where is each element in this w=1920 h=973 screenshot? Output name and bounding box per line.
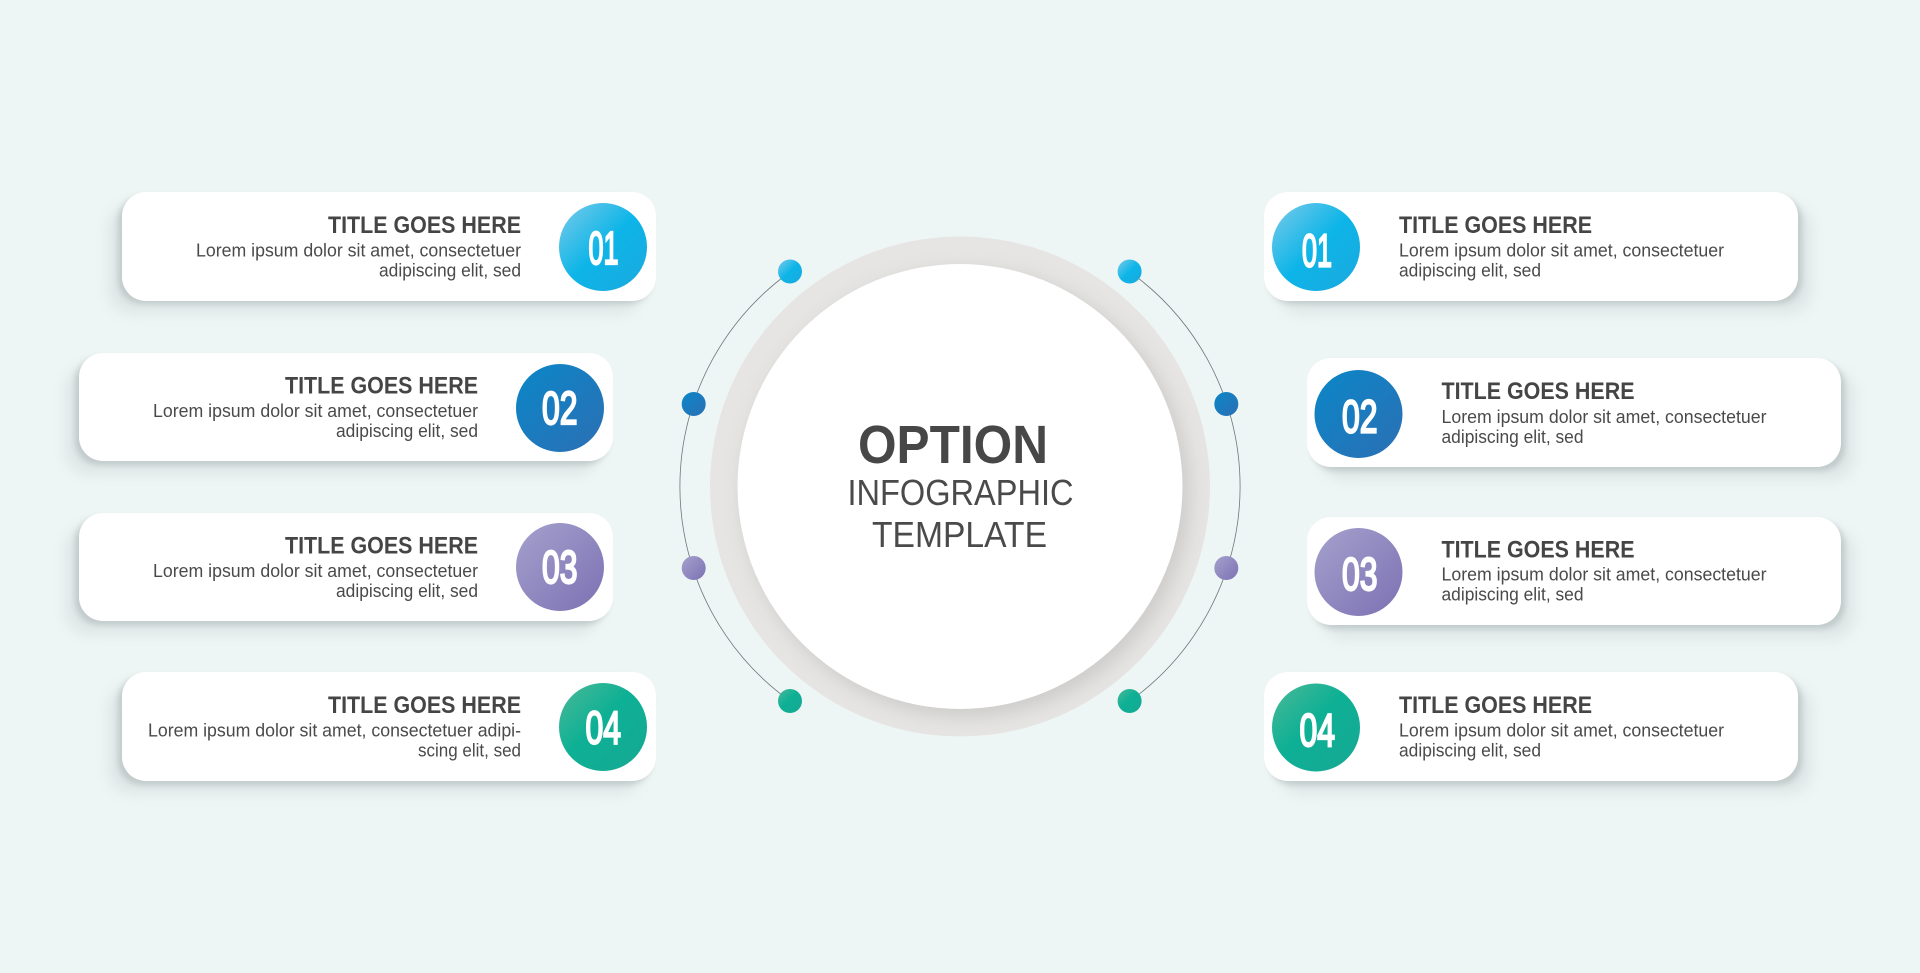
panel: central circle (710, 236, 1210, 736)
icon: dot 4 (1118, 689, 1142, 713)
icon: number 02 (1314, 370, 1402, 458)
panel: left card 3 (65, 513, 613, 635)
icon: dot 4 (778, 689, 802, 713)
text block: adipiscing elit, sed (1442, 427, 1584, 447)
icon: number 03: 03 (1342, 548, 1378, 600)
text block: Lorem ipsum dolor sit amet, consectetuer (153, 561, 478, 581)
icon: number 03 (516, 523, 604, 611)
heading: TITLE GOES HERE (1399, 212, 1592, 239)
panel: right card 3 (1307, 517, 1855, 639)
text block: adipiscing elit, sed (379, 260, 521, 280)
text block: Lorem ipsum dolor sit amet, consectetuer (1399, 240, 1724, 260)
text block: infographic template: INFOGRAPHIC (848, 472, 1074, 513)
text block: Lorem ipsum dolor sit amet, consectetuer (1399, 720, 1724, 740)
icon: number 04: 04 (1300, 704, 1335, 756)
icon: number 02: 02 (542, 382, 578, 434)
heading: TITLE GOES HERE (285, 532, 478, 560)
icon: number 04 (1272, 684, 1360, 772)
panel: right card 4 (1264, 672, 1812, 794)
icon: number 01: 01 (1302, 224, 1332, 276)
heading: TITLE GOES HERE (328, 692, 521, 719)
heading: TITLE GOES HERE (1442, 378, 1634, 405)
heading: TITLE GOES HERE (285, 372, 478, 400)
panel: left card 4 (108, 672, 656, 794)
text block: infographic template: TEMPLATE (872, 514, 1047, 555)
icon: number 02 (516, 364, 604, 452)
text block: scing elit, sed (418, 740, 521, 760)
icon: dot 1 (778, 260, 802, 284)
heading: TITLE GOES HERE (328, 212, 521, 239)
text block: Lorem ipsum dolor sit amet, consectetuer (153, 401, 478, 421)
icon: number 01 (1272, 203, 1360, 291)
icon: dot 2 (682, 392, 706, 416)
left connector arc with dots (680, 260, 802, 713)
text block: Lorem ipsum dolor sit amet, consectetuer adipi- (148, 720, 521, 740)
icon: dot 1 (1118, 260, 1142, 284)
heading: TITLE GOES HERE (1399, 692, 1592, 719)
icon: number 02: 02 (1342, 390, 1378, 442)
text block: adipiscing elit, sed (336, 581, 478, 601)
right connector arc with dots (1118, 260, 1240, 713)
text block: Lorem ipsum dolor sit amet, consectetuer (1442, 407, 1766, 427)
icon: number 01: 01 (588, 222, 618, 274)
icon: dot 3 (1214, 556, 1238, 580)
icon: dot 3 (682, 556, 706, 580)
text block: adipiscing elit, sed (1399, 740, 1541, 760)
panel: left card 2 (65, 353, 613, 475)
text block: adipiscing elit, sed (336, 421, 478, 441)
panel: left card 1 (108, 192, 656, 314)
heading: TITLE GOES HERE (1442, 536, 1634, 564)
icon: dot 2 (1214, 392, 1238, 416)
heading: option: OPTION (858, 415, 1048, 475)
icon: number 01 (559, 203, 647, 291)
text block: Lorem ipsum dolor sit amet, consectetuer (1442, 564, 1766, 584)
icon: number 03: 03 (542, 541, 578, 593)
panel: right card 2 (1307, 358, 1855, 480)
icon: number 04 (559, 683, 647, 771)
text block: Lorem ipsum dolor sit amet, consectetuer (196, 240, 521, 260)
icon: number 04: 04 (586, 702, 621, 754)
text block: adipiscing elit, sed (1399, 260, 1541, 280)
panel: right card 1 (1264, 192, 1812, 314)
icon: number 03 (1314, 528, 1402, 616)
text block: adipiscing elit, sed (1442, 584, 1584, 604)
